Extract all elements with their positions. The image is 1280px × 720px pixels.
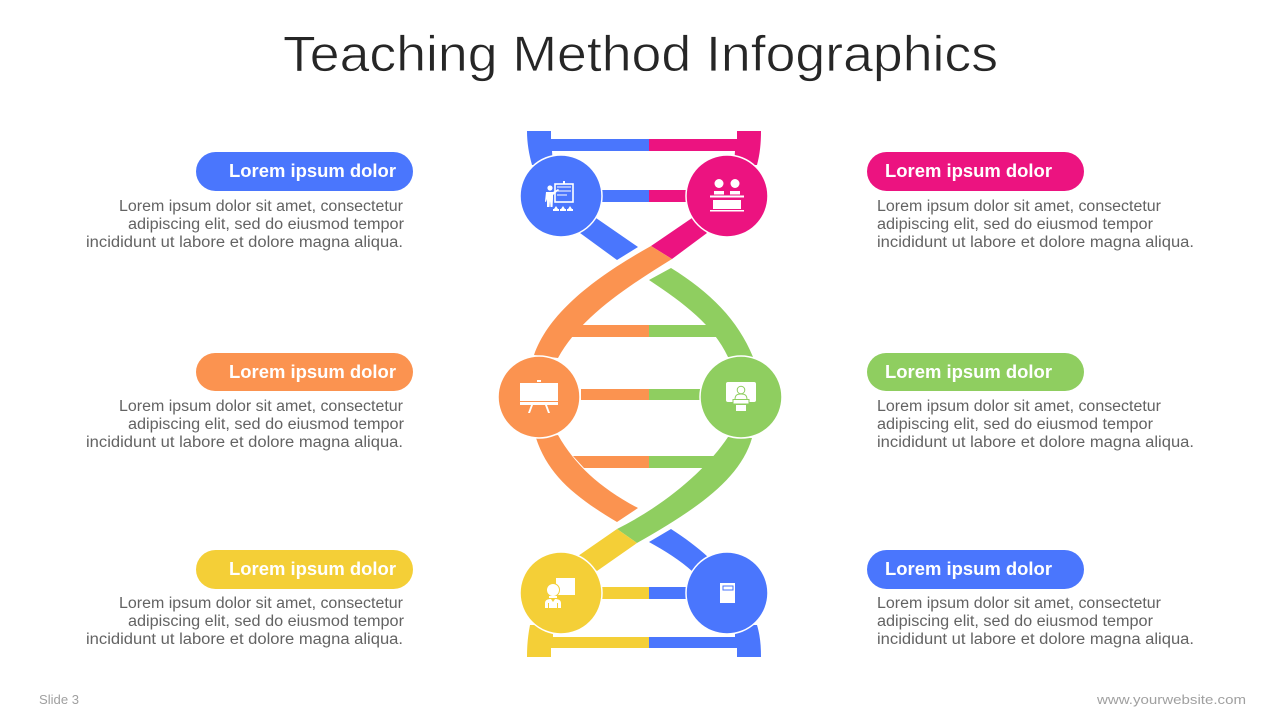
strand: upper orange [534,246,672,358]
rung: bottom yellow and blue [600,587,689,599]
pill heading [196,550,413,589]
body text [877,398,1194,451]
node: lectern screen icon circle [700,356,782,438]
node: whiteboard icon circle [498,356,580,438]
body text [877,198,1194,251]
pill heading: Lorem ipsum dolor [885,559,1052,579]
panel: middle left [86,353,413,451]
DNA helix diagram [527,131,761,657]
pill heading: Lorem ipsum dolor [229,161,396,181]
strand: top blue [527,131,649,165]
body text: incididunt ut labore et dolore magna aliqua. [86,434,403,451]
body text: Lorem ipsum dolor sit amet, consectetur [119,595,403,612]
panel: middle right [867,353,1194,451]
panel: bottom right [867,550,1194,648]
body text [86,595,404,648]
body text: Lorem ipsum dolor sit amet, consectetur [119,198,403,215]
icon: two speakers at desk [710,179,744,212]
body text: Lorem ipsum dolor sit amet, consectetur [877,198,1161,215]
body text: incididunt ut labore et dolore magna aliqua. [86,234,403,251]
body text: adipiscing elit, sed do eiusmod tempor [877,216,1153,233]
rung: lower orange and green [573,456,715,468]
node: presenter icon circle [520,155,602,237]
pill heading [196,152,413,191]
pill heading: Lorem ipsum dolor [885,161,1052,181]
panel: top left [86,152,413,251]
rung: upper orange and green [568,325,717,337]
body text: incididunt ut labore et dolore magna aliqua. [877,434,1194,451]
pill heading [867,152,1084,191]
icon: notebook [720,583,735,603]
strand: lower green [617,437,752,543]
body text: Lorem ipsum dolor sit amet, consectetur [877,595,1161,612]
strand: lower yellow segment [578,529,637,571]
body text: adipiscing elit, sed do eiusmod tempor [128,416,404,433]
body text: Lorem ipsum dolor sit amet, consectetur [877,398,1161,415]
icon: whiteboard on easel [520,380,558,413]
strand: upper green [649,268,753,357]
body text: adipiscing elit, sed do eiusmod tempor [128,216,404,233]
body text: incididunt ut labore et dolore magna aliqua. [877,234,1194,251]
icon: speaker at lectern with screen [726,382,756,411]
footer: website: www.yourwebsite.com [1096,692,1246,707]
title: Teaching Method Infographics [283,26,998,82]
strand: bottom yellow [527,625,649,657]
body text [877,595,1194,648]
body text [86,398,404,451]
strand: upper blue segment [580,218,638,260]
pill heading: Lorem ipsum dolor [885,362,1052,382]
pill heading [867,550,1084,589]
body text: adipiscing elit, sed do eiusmod tempor [877,416,1153,433]
body text: adipiscing elit, sed do eiusmod tempor [877,613,1153,630]
node: notebook icon circle [686,552,768,634]
body text: incididunt ut labore et dolore magna aliqua. [86,631,403,648]
panel: bottom left [86,550,413,648]
pill heading [867,353,1084,391]
strand: lower orange [536,435,638,522]
body text [86,198,404,251]
strand: bottom blue [649,625,761,657]
node: teacher speech icon circle [520,552,602,634]
panel: top right [867,152,1194,251]
icon: presenter at board [545,181,573,211]
strand: top pink [649,131,761,165]
rung: top blue and pink [600,190,689,202]
pill heading [196,353,413,391]
node: panel discussion icon circle [686,155,768,237]
footer: slide number: Slide 3 [39,692,79,707]
body text: Lorem ipsum dolor sit amet, consectetur [119,398,403,415]
rung: middle orange and green [581,389,703,400]
icon: teacher with speech board [545,578,575,608]
strand: lower blue segment [649,529,708,572]
body text: incididunt ut labore et dolore magna aliqua. [877,631,1194,648]
pill heading: Lorem ipsum dolor [229,559,396,579]
strand: upper pink segment [651,218,707,259]
pill heading: Lorem ipsum dolor [229,362,396,382]
body text: adipiscing elit, sed do eiusmod tempor [128,613,404,630]
